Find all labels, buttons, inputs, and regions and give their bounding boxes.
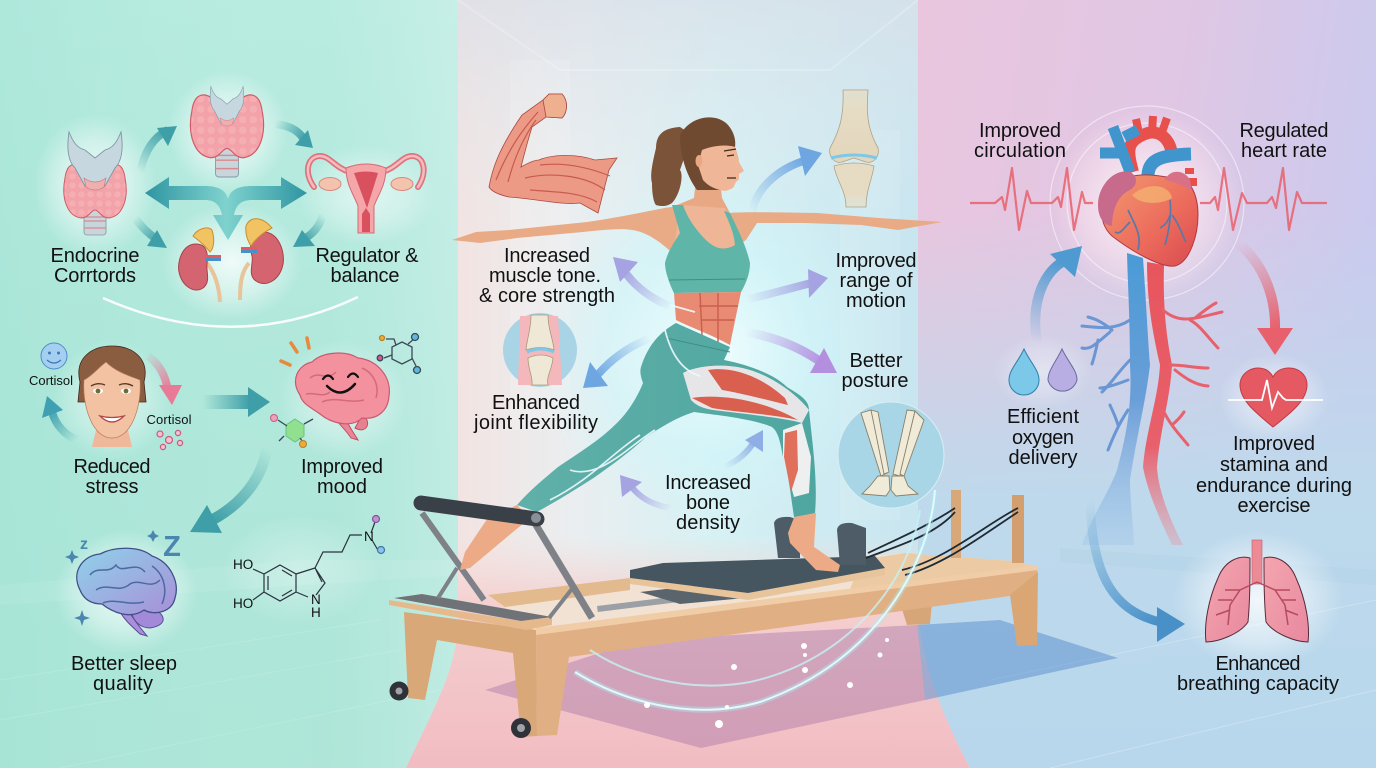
label: Efficient oxygen delivery: oxygen bbox=[1012, 427, 1074, 449]
chart: serotonin structure: N bbox=[364, 529, 374, 544]
label: Increased bone density: bone bbox=[686, 492, 730, 514]
chart: serotonin structure: HO bbox=[233, 557, 253, 572]
icon: smiley bbox=[41, 343, 67, 369]
arrow: teal cortisol up bbox=[42, 396, 77, 440]
label: Improved circulation: circulation bbox=[974, 140, 1066, 162]
thigh muscle overlay bbox=[683, 366, 809, 423]
arrow: heart to stamina bbox=[1238, 243, 1293, 355]
icon: sparkles bbox=[65, 530, 159, 626]
icon: happy brain bbox=[296, 353, 389, 440]
icon: thyroid left bbox=[64, 132, 126, 235]
reformer front rail and leg bbox=[536, 567, 1038, 736]
label: Reduced stress: Reduced bbox=[74, 456, 150, 478]
icon: kidneys with adrenal glands bbox=[179, 219, 283, 302]
reformer footbar uprights rear bbox=[422, 513, 484, 600]
label: Regulator & balance: balance bbox=[330, 265, 400, 287]
chart: serotonin structure bbox=[233, 516, 384, 620]
icon: heart bbox=[1098, 116, 1198, 266]
label: Cortisol left: Cortisol bbox=[29, 373, 73, 388]
front foot bbox=[788, 513, 840, 572]
icon: uterus and ovaries bbox=[308, 156, 424, 233]
reformer right leg bbox=[1010, 572, 1038, 646]
label: Better posture: posture bbox=[842, 370, 908, 392]
label: Enhanced joint flexibility bbox=[473, 392, 598, 434]
exercise mat bbox=[485, 620, 1118, 748]
arrow: pink cortisol down bbox=[148, 356, 182, 405]
eye and mouth bbox=[724, 149, 736, 178]
label: Improved circulation bbox=[974, 120, 1066, 162]
arrow: to better posture bbox=[746, 332, 837, 373]
energy trails bbox=[575, 490, 935, 728]
artery bbox=[1143, 262, 1222, 545]
chest bbox=[672, 205, 742, 262]
sports top bbox=[665, 205, 750, 293]
label: Efficient oxygen delivery: delivery bbox=[1008, 447, 1078, 469]
icon: lungs bbox=[1206, 540, 1308, 642]
arrow: uterus to kidneys bbox=[293, 215, 323, 247]
arrow: top gland to uterus bbox=[275, 124, 313, 148]
label: Enhanced breathing capacity bbox=[1177, 653, 1339, 695]
icon: sleep z letters bbox=[80, 531, 181, 563]
label: Efficient oxygen delivery: Efficient bbox=[1007, 406, 1079, 428]
vein bbox=[1082, 253, 1150, 545]
reformer rail top strip bbox=[536, 565, 1038, 635]
label: Improved stamina and endurance during exercise: endurance during bbox=[1196, 475, 1352, 497]
arrow: mood to sleep bbox=[190, 448, 267, 533]
arrow: up to knee bbox=[724, 430, 763, 467]
label: Increased muscle tone & core strength bbox=[479, 245, 615, 307]
arrow: thyroid to top gland bbox=[140, 126, 177, 172]
label: Better posture bbox=[842, 350, 908, 392]
label: Improved circulation: Improved bbox=[979, 120, 1061, 142]
label: Improved stamina and endurance during exercise: exercise bbox=[1238, 495, 1310, 517]
icon: sleep z letters: z bbox=[80, 536, 88, 553]
label: Improved mood: Improved bbox=[301, 456, 383, 478]
label: Improved range of motion: motion bbox=[846, 290, 906, 312]
label: Increased bone density bbox=[665, 472, 751, 534]
face bbox=[698, 146, 744, 191]
label: Regulator & balance: Regulator & bbox=[316, 245, 419, 267]
ecg line left bbox=[970, 168, 1093, 230]
reformer platform bbox=[389, 594, 552, 630]
icon: sleep z letters: Z bbox=[163, 531, 181, 563]
chart: serotonin structure: H bbox=[311, 605, 321, 620]
reformer foot bar in front bbox=[421, 503, 592, 618]
label: Endocrine Corrtords: Corrtords bbox=[54, 265, 136, 287]
arrow: to joint flexibility bbox=[583, 338, 650, 388]
label: Cortisol right: Cortisol bbox=[146, 412, 192, 427]
reformer rear legs and rail bbox=[488, 490, 1038, 630]
label: Regulated heart rate: Regulated bbox=[1240, 120, 1328, 142]
panel background: cardiovascular (right) bbox=[918, 0, 1376, 768]
label: Endocrine Corrtords: Endocrine bbox=[50, 245, 140, 267]
label: Efficient oxygen delivery bbox=[1007, 406, 1079, 469]
heart halo rings bbox=[1050, 106, 1244, 300]
icon: flexed arm muscle bbox=[489, 94, 617, 213]
label: Improved range of motion bbox=[836, 250, 916, 312]
label: Increased bone density: Increased bbox=[665, 472, 751, 494]
icon: knee joint bones bbox=[830, 90, 878, 207]
label: Better sleep quality bbox=[71, 653, 177, 695]
label: Increased bone density: density bbox=[676, 512, 740, 534]
chart: serotonin structure: HO bbox=[233, 596, 253, 611]
label: Reduced stress bbox=[74, 456, 150, 498]
label: Increased muscle tone & core strength: muscle tone. bbox=[489, 265, 601, 287]
label: Improved stamina and endurance during exercise: Improved bbox=[1233, 433, 1315, 455]
icon: cortisol molecules bbox=[157, 430, 183, 450]
label: Better sleep quality: Better sleep bbox=[71, 653, 177, 675]
reformer machine bbox=[389, 490, 1038, 738]
icon: molecule lower bbox=[270, 414, 313, 448]
label: Improved range of motion: range of bbox=[840, 270, 913, 292]
arrow: three-way balance bbox=[145, 177, 307, 240]
ecg line right bbox=[1200, 168, 1327, 230]
label: Increased muscle tone & core strength: & core strength bbox=[479, 285, 615, 307]
label: Improved mood: mood bbox=[317, 476, 367, 498]
icon: joy rays bbox=[281, 338, 309, 365]
abdominal muscles bbox=[674, 292, 741, 345]
leggings bbox=[517, 323, 816, 517]
label: Regulated heart rate: heart rate bbox=[1241, 140, 1327, 162]
label: Improved range of motion: Improved bbox=[836, 250, 916, 272]
label: Reduced stress: stress bbox=[86, 476, 138, 498]
blood vessels bbox=[1082, 253, 1222, 545]
right arm bbox=[718, 210, 942, 250]
icon: molecule upper bbox=[377, 334, 420, 374]
label: Endocrine Corrtords bbox=[50, 245, 140, 287]
icon: knee cross-section circle bbox=[503, 313, 577, 387]
icon: lower leg bones circle bbox=[838, 402, 944, 508]
energy on leg bbox=[550, 305, 700, 500]
chart: serotonin structure: N bbox=[311, 592, 321, 607]
icon: thyroid top bbox=[190, 87, 264, 177]
left arm bbox=[452, 207, 690, 263]
arrow: to knee joint bbox=[752, 146, 822, 213]
soft glow spots behind icons bbox=[33, 70, 1343, 670]
label: Enhanced joint flexibility: Enhanced bbox=[492, 392, 580, 414]
icon: oxygen drops bbox=[1009, 349, 1077, 395]
label: Improved mood bbox=[301, 456, 383, 498]
arrow: thyroid to kidneys bbox=[135, 218, 167, 248]
hair and head bbox=[680, 117, 735, 190]
neck and shoulders bbox=[672, 178, 730, 213]
label: Increased muscle tone & core strength: Increased bbox=[504, 245, 590, 267]
decorative arc bbox=[103, 297, 358, 327]
back foot bbox=[460, 505, 530, 570]
reformer left side panel and leg bbox=[404, 612, 537, 737]
label: Better posture: Better bbox=[850, 350, 903, 372]
ponytail bbox=[651, 127, 692, 206]
icon: sleeping brain bbox=[77, 548, 176, 636]
label: Improved stamina and endurance during exercise: stamina and bbox=[1220, 454, 1328, 476]
icon: smiling face bbox=[78, 346, 146, 447]
arrow: stress to mood bbox=[203, 387, 270, 417]
panel background: hormonal wellbeing (teal) bbox=[0, 0, 470, 768]
label: Enhanced breathing capacity: Enhanced bbox=[1216, 653, 1300, 675]
label: Enhanced breathing capacity: breathing capacity bbox=[1177, 673, 1339, 695]
label: Regulated heart rate bbox=[1240, 120, 1328, 162]
panel background: musculoskeletal (centre) bbox=[406, 0, 970, 768]
label: Better sleep quality: quality bbox=[93, 673, 153, 695]
arrow: oxygen to heart bbox=[1035, 246, 1082, 343]
reformer shoulder rests bbox=[774, 517, 866, 565]
reformer ropes bbox=[866, 508, 1018, 575]
label: Regulator & balance bbox=[316, 245, 419, 287]
reformer wheels bbox=[390, 682, 531, 738]
arrow: to back leg bbox=[620, 475, 672, 508]
arrow: to lungs bbox=[1090, 490, 1185, 642]
shin muscle overlay bbox=[783, 423, 811, 497]
label: Improved stamina and endurance during exercise bbox=[1196, 433, 1352, 517]
ear bbox=[696, 155, 702, 167]
arrow: to muscle tone bbox=[613, 257, 672, 307]
woman in lunge bbox=[452, 117, 942, 572]
label: Enhanced joint flexibility: joint flexibility bbox=[473, 412, 598, 434]
icon: heart with pulse bbox=[1228, 368, 1323, 427]
arrow: to range of motion bbox=[746, 269, 828, 300]
reformer carriage bbox=[630, 556, 885, 600]
